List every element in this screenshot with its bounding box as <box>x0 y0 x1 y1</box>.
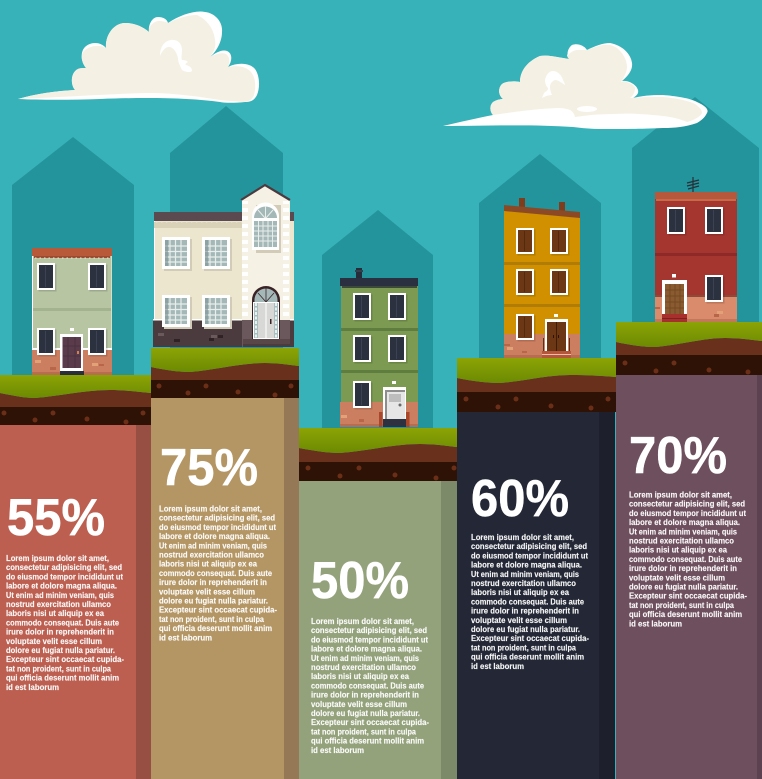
house 2: cream manor <box>153 184 294 347</box>
body text 4: tat non proident, sunt in culpa <box>471 642 576 652</box>
body text 2: do eiusmod tempor incididunt ut <box>159 522 276 532</box>
body text 3: qui officia deserunt mollit anim <box>311 736 424 746</box>
body text 1: irure dolor in reprehenderit in <box>6 627 114 637</box>
body text 4 <box>471 532 589 671</box>
ground 3 <box>299 428 457 481</box>
body text 2: Ut enim ad minim veniam, quis <box>159 540 267 550</box>
body text 4: commodo consequat. Duis aute <box>471 596 584 606</box>
body text 3: Excepteur sint occaecat cupida- <box>311 717 429 727</box>
body text 3: nostrud exercitation ullamco <box>311 662 416 672</box>
stat 50%: 50% <box>311 552 409 610</box>
house 1: green <box>32 248 112 375</box>
body text 5: Ut enim ad minim veniam, quis <box>629 526 737 536</box>
house 4: yellow <box>504 198 580 358</box>
body text 5: irure dolor in reprehenderit in <box>629 563 737 573</box>
body text 5: qui officia deserunt mollit anim <box>629 609 742 619</box>
column 2: 75% <box>151 348 299 779</box>
body text 3: id est laborum <box>311 745 364 755</box>
house 3: olive green <box>340 268 418 427</box>
body text 1: labore et dolore magna aliqua. <box>6 581 117 591</box>
body text 2: dolore eu fugiat nulla pariatur. <box>159 596 268 606</box>
body text 5: do eiusmod tempor incididunt ut <box>629 508 746 518</box>
body text 2: id est laborum <box>159 632 212 642</box>
body text 5: tat non proident, sunt in culpa <box>629 600 734 610</box>
body text 5: consectetur adipisicing elit, sed <box>629 499 745 509</box>
body text 4: dolore eu fugiat nulla pariatur. <box>471 624 580 634</box>
body text 2: tat non proident, sunt in culpa <box>159 614 264 624</box>
body text 1: Lorem ipsum dolor sit amet, <box>6 553 109 563</box>
body text 2: qui officia deserunt mollit anim <box>159 623 272 633</box>
body text 4: nostrud exercitation ullamco <box>471 578 576 588</box>
house 5: red <box>655 177 737 323</box>
body text 2: laboris nisi ut aliquip ex ea <box>159 559 257 569</box>
column 5: 70% <box>616 322 762 779</box>
body text 1: dolore eu fugiat nulla pariatur. <box>6 645 115 655</box>
body text 1: qui officia deserunt mollit anim <box>6 673 119 683</box>
column 4: 60% <box>457 358 616 779</box>
ground 4 <box>457 358 616 412</box>
body text 5: commodo consequat. Duis aute <box>629 554 742 564</box>
stat 60%: 60% <box>471 470 569 528</box>
ground 2 <box>151 348 299 398</box>
body text 2: irure dolor in reprehenderit in <box>159 577 267 587</box>
stat 70%: 70% <box>629 427 727 485</box>
body text 3: Lorem ipsum dolor sit amet, <box>311 616 414 626</box>
body text 4: qui officia deserunt mollit anim <box>471 652 584 662</box>
body text 5: Lorem ipsum dolor sit amet, <box>629 490 732 500</box>
body text 2 <box>159 504 277 642</box>
body text 3: laboris nisi ut aliquip ex ea <box>311 671 409 681</box>
body text 4: voluptate velit esse cillum <box>471 615 567 625</box>
body text 4: labore et dolore magna aliqua. <box>471 560 582 570</box>
body text 4: laboris nisi ut aliquip ex ea <box>471 587 569 597</box>
body text 3: commodo consequat. Duis aute <box>311 680 424 690</box>
body text 1: id est laborum <box>6 682 59 692</box>
body text 1: nostrud exercitation ullamco <box>6 599 111 609</box>
body text 3: irure dolor in reprehenderit in <box>311 690 419 700</box>
body text 3: tat non proident, sunt in culpa <box>311 726 416 736</box>
body text 3: do eiusmod tempor incididunt ut <box>311 634 428 644</box>
ground 5 <box>616 322 762 375</box>
body text 4: irure dolor in reprehenderit in <box>471 606 579 616</box>
body text 1: Excepteur sint occaecat cupida- <box>6 654 124 664</box>
body text 1: Ut enim ad minim veniam, quis <box>6 590 114 600</box>
body text 4: Lorem ipsum dolor sit amet, <box>471 532 574 542</box>
body text 3: Ut enim ad minim veniam, quis <box>311 653 419 663</box>
body text 2: consectetur adipisicing elit, sed <box>159 513 275 523</box>
house silhouettes <box>12 97 759 430</box>
body text 2: voluptate velit esse cillum <box>159 586 255 596</box>
body text 1: voluptate velit esse cillum <box>6 636 102 646</box>
cloud right <box>443 43 708 129</box>
ground 1 <box>0 375 151 425</box>
body text 2: commodo consequat. Duis aute <box>159 568 272 578</box>
body text 2: Excepteur sint occaecat cupida- <box>159 605 277 615</box>
body text 1 <box>6 553 124 692</box>
body text 5: dolore eu fugiat nulla pariatur. <box>629 582 738 592</box>
body text 3 <box>311 616 429 755</box>
body text 1: laboris nisi ut aliquip ex ea <box>6 608 104 618</box>
body text 5 <box>629 490 747 628</box>
body text 5: id est laborum <box>629 618 682 628</box>
body text 3: dolore eu fugiat nulla pariatur. <box>311 708 420 718</box>
body text 4: consectetur adipisicing elit, sed <box>471 541 587 551</box>
body text 5: laboris nisi ut aliquip ex ea <box>629 545 727 555</box>
body text 2: labore et dolore magna aliqua. <box>159 531 270 541</box>
stat 75%: 75% <box>160 439 258 497</box>
body text 4: Excepteur sint occaecat cupida- <box>471 633 589 643</box>
stat 55%: 55% <box>7 489 105 547</box>
body text 3: voluptate velit esse cillum <box>311 699 407 709</box>
body text 4: do eiusmod tempor incididunt ut <box>471 550 588 560</box>
body text 3: labore et dolore magna aliqua. <box>311 644 422 654</box>
body text 1: tat non proident, sunt in culpa <box>6 663 111 673</box>
body text 4: id est laborum <box>471 661 524 671</box>
body text 5: labore et dolore magna aliqua. <box>629 517 740 527</box>
body text 2: Lorem ipsum dolor sit amet, <box>159 504 262 514</box>
body text 1: do eiusmod tempor incididunt ut <box>6 571 123 581</box>
body text 4: Ut enim ad minim veniam, quis <box>471 569 579 579</box>
body text 5: nostrud exercitation ullamco <box>629 536 734 546</box>
body text 3: consectetur adipisicing elit, sed <box>311 625 427 635</box>
body text 1: commodo consequat. Duis aute <box>6 617 119 627</box>
body text 1: consectetur adipisicing elit, sed <box>6 562 122 572</box>
cloud left <box>18 12 259 103</box>
column 3: 50% <box>299 428 457 779</box>
body text 2: nostrud exercitation ullamco <box>159 550 264 560</box>
column 1: 55% <box>0 375 151 779</box>
body text 5: voluptate velit esse cillum <box>629 572 725 582</box>
body text 5: Excepteur sint occaecat cupida- <box>629 591 747 601</box>
